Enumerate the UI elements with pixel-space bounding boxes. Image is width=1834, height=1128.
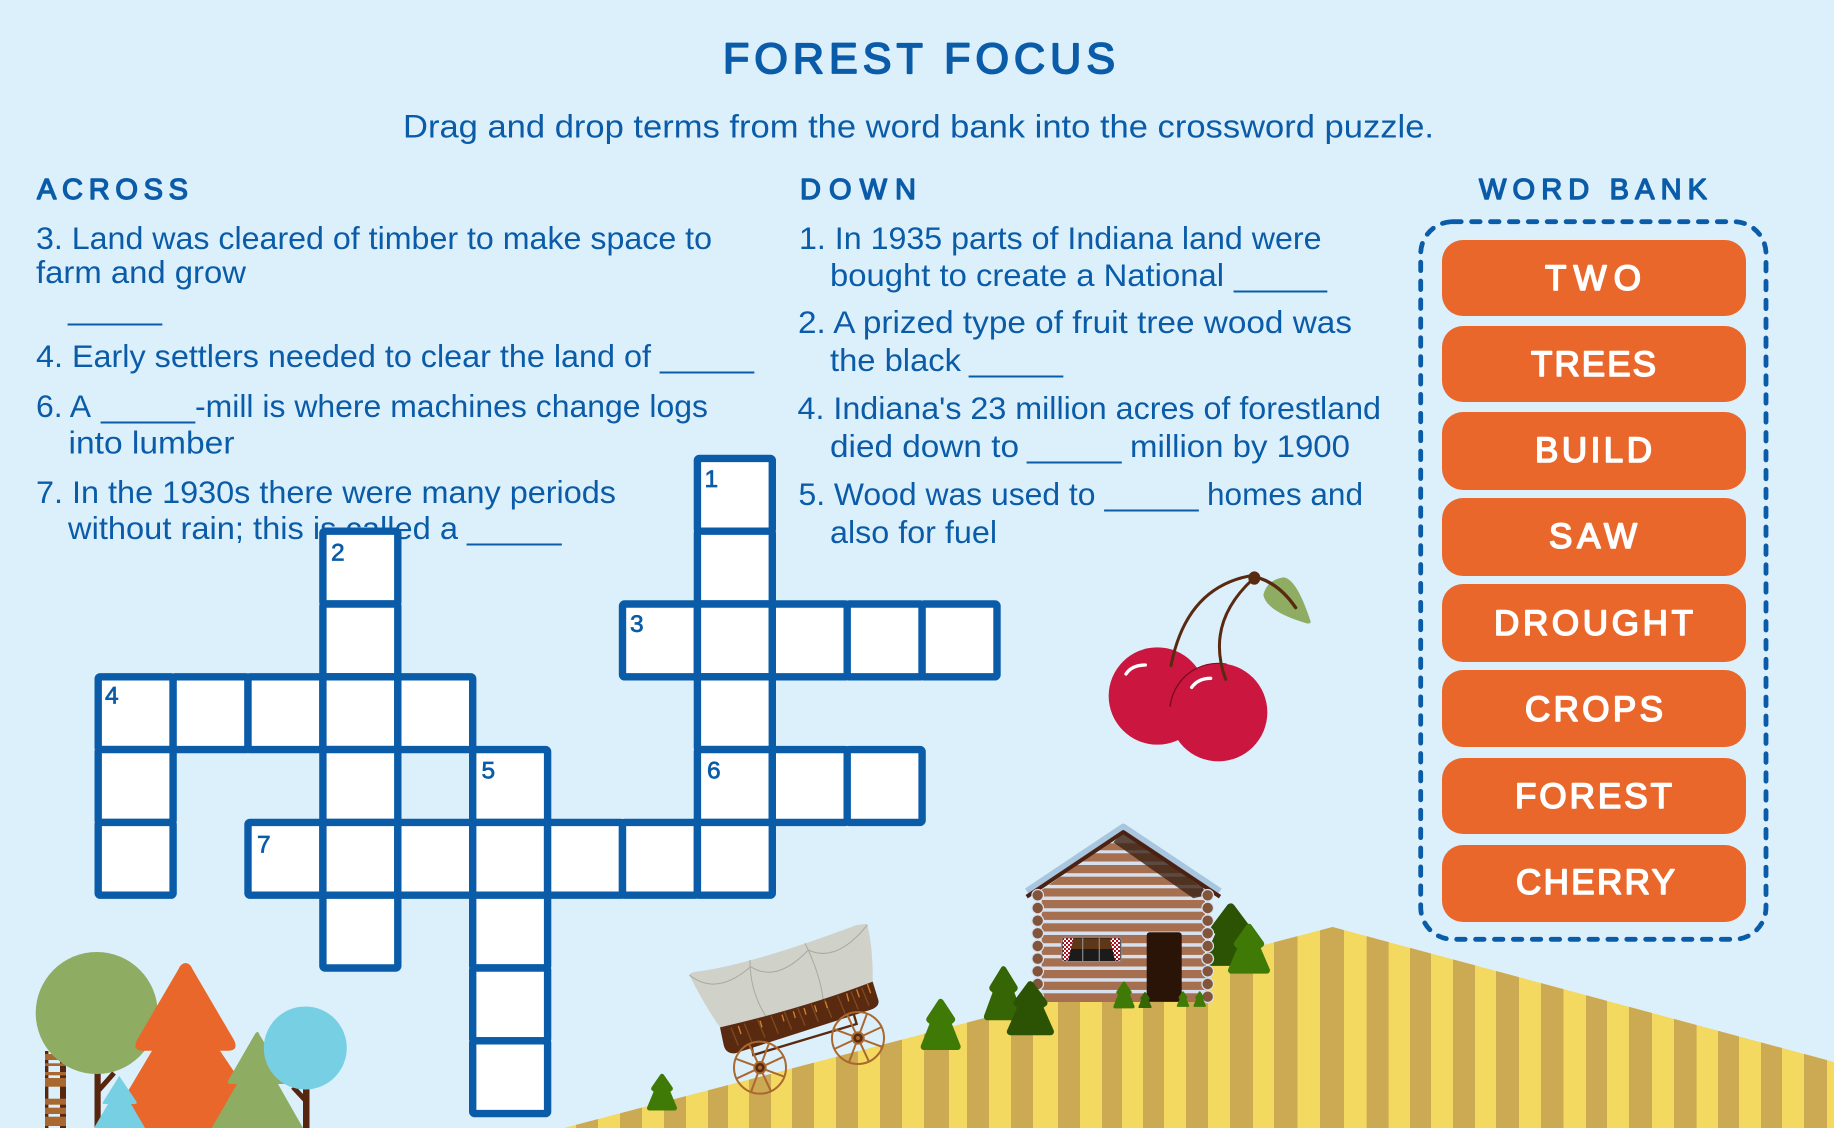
clue: across 3: ______ (67, 290, 162, 326)
cabin logs (1040, 843, 1207, 1002)
clue: down 1: bought to create a National (830, 257, 1224, 293)
clue: down 2: 2. A prized type of fruit tree wood was (798, 304, 1352, 340)
clue: across 3: farm and grow (36, 254, 246, 290)
panel: down clues (798, 174, 1381, 550)
clue: across 6: -mill is where machines change logs (195, 388, 708, 424)
word: saw: SAW (1549, 517, 1637, 556)
green pine (212, 1032, 303, 1128)
rear wheel (734, 1042, 786, 1094)
title: FOREST FOCUS (723, 35, 1115, 83)
pine on hill, medium (924, 1002, 958, 1047)
wagon canvas (689, 924, 873, 1027)
small pine by wall (1194, 992, 1205, 1006)
clue: across 6: ______ (100, 388, 195, 424)
clue: across 3 (36, 220, 712, 326)
small pine by door (1178, 992, 1188, 1006)
right cherry (1169, 663, 1267, 761)
word: cherry: CHERRY (1516, 863, 1675, 902)
pine left of cabin (987, 970, 1020, 1017)
instructions: Drag and drop terms from the word bank into the crossword puzzle. (403, 108, 1434, 144)
small dark pine at cabin (1139, 993, 1151, 1007)
cell numbers: 6 (707, 758, 721, 785)
wagon axle frame (752, 1015, 857, 1055)
round green tree (36, 952, 158, 1128)
cell numbers (105, 466, 721, 858)
stems (1171, 571, 1296, 679)
pine beside cabin (1231, 927, 1267, 970)
small pine at cabin (1115, 983, 1133, 1007)
heading: across: ACROSS (37, 174, 188, 206)
word: trees (1442, 326, 1746, 402)
roof shadow (1113, 832, 1203, 898)
word: forest (1442, 758, 1746, 834)
dashed word bank frame (1421, 222, 1766, 939)
wagon body (720, 982, 879, 1053)
roof (1027, 826, 1220, 897)
cabin door (1147, 932, 1182, 1002)
panel: word bank (1421, 174, 1766, 939)
cell numbers: 5 (482, 758, 495, 785)
clue: down 4 (798, 390, 1381, 464)
clue: across 6: into lumber (68, 424, 234, 460)
round blue tree (212, 1006, 347, 1128)
left cherry (1109, 647, 1206, 745)
word: crops: CROPS (1525, 690, 1663, 729)
clue: across 6 (36, 388, 708, 460)
clue: down 4: died down to (830, 428, 1019, 464)
illustration: trees at lower left (36, 952, 347, 1128)
word: build (1442, 412, 1746, 490)
word: two (1442, 240, 1746, 316)
clue: down 2 (798, 304, 1352, 378)
cabin walls (1042, 832, 1205, 1002)
clue: down 4: 4. Indiana's 23 million acres of forestland (798, 390, 1381, 426)
cell numbers: 1 (704, 466, 718, 493)
crossword grid (98, 458, 997, 1114)
clue: down 4: million by 1900 (1130, 428, 1350, 464)
pine on hill, small (649, 1076, 675, 1108)
clue: down 5 (798, 476, 1363, 550)
word: saw (1442, 498, 1746, 576)
illustration: covered wagon (689, 924, 884, 1094)
clue: across 4: 4. Early settlers needed to clear the land of (36, 338, 651, 374)
clue: down 4: ______ (1026, 428, 1122, 464)
word: cherry (1442, 845, 1746, 922)
illustration: log cabin (1027, 826, 1220, 1002)
log ends (1032, 890, 1213, 1002)
ladder (45, 1051, 66, 1128)
clue: down 1: ______ (1233, 257, 1327, 293)
clue: across 7: 7. In the 1930s there were many periods (36, 474, 616, 510)
front wheel (832, 1012, 884, 1064)
word: build: BUILD (1535, 431, 1652, 470)
leaf (1263, 577, 1311, 623)
orange pine (106, 963, 272, 1128)
heading: word bank: WORD BANK (1479, 174, 1708, 206)
clue: across 4: ______ (659, 338, 754, 374)
pine behind cabin, dark (1207, 907, 1254, 962)
clue: down 5: ______ (1104, 476, 1199, 512)
clue: across 3: 3. Land was cleared of timber to make space to (36, 220, 712, 256)
clue: down 1 (799, 220, 1327, 293)
clue: down 1: 1. In 1935 parts of Indiana land were (799, 220, 1322, 256)
light blue pine (94, 1076, 145, 1128)
clue: across 7: ______ (466, 510, 562, 546)
illustration: cherries (1109, 571, 1311, 761)
hill with stripes (564, 920, 1834, 1128)
clue: down 5: homes and (1207, 476, 1363, 512)
word: trees: TREES (1531, 345, 1656, 384)
word: two: TWO (1545, 259, 1641, 298)
heading: down: DOWN (800, 174, 916, 206)
word: forest: FOREST (1515, 777, 1672, 816)
clue: down 5: also for fuel (830, 514, 997, 550)
word: drought (1442, 584, 1746, 662)
clue: down 5: 5. Wood was used to (798, 476, 1096, 512)
cell numbers: 4 (105, 682, 119, 710)
panel: across clues (36, 174, 754, 546)
cell numbers: 2 (331, 540, 345, 567)
dark pine left of cabin (1010, 985, 1050, 1032)
clue: across 6: 6. A (36, 388, 91, 424)
clue: across 7 (36, 474, 616, 546)
word: crops (1442, 670, 1746, 747)
clue: down 2: the black (830, 342, 961, 378)
clue: down 2: ______ (968, 342, 1063, 378)
cell numbers: 3 (630, 611, 644, 638)
cabin window (1062, 937, 1121, 962)
cell numbers: 7 (257, 832, 271, 858)
word: drought: DROUGHT (1494, 604, 1693, 643)
clue: across 7: without rain; this is called a (67, 510, 458, 546)
